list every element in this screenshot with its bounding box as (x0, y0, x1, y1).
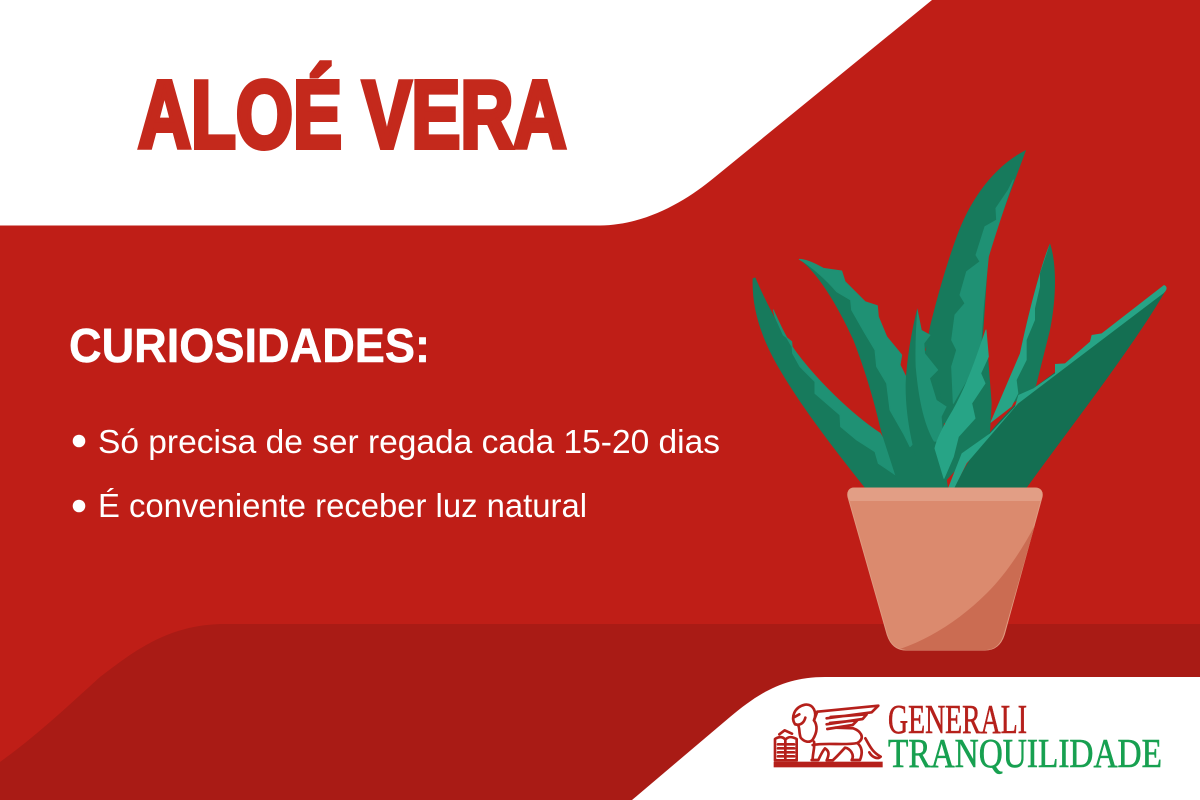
logo base bar (774, 762, 883, 767)
pot rim (848, 488, 1042, 501)
leaf: right narrow (990, 243, 1055, 423)
title: ALOÉ VERA (138, 62, 566, 169)
bullet list (73, 423, 720, 524)
pot body (848, 488, 1042, 650)
panel: bottom white logo shape (632, 677, 1200, 800)
bullet dot 1 (73, 435, 85, 447)
open book (775, 730, 797, 760)
lion wing (814, 706, 878, 729)
panel: dark red floor (0, 624, 1200, 800)
pot shadow (900, 525, 1035, 650)
leaf: big right front (947, 285, 1167, 490)
bullet text 2: É conveniente receber luz natural (98, 487, 587, 524)
lion body (812, 728, 862, 760)
lion head and mane (793, 705, 817, 742)
leaf: far left (753, 277, 907, 490)
leaf: second left (799, 259, 930, 490)
lion face (793, 714, 805, 725)
leaf: small centre left (906, 308, 948, 490)
leaf: tall centre (925, 150, 1026, 423)
bullet dot 2 (73, 500, 85, 512)
leaf: front centre (935, 330, 992, 480)
heading: curiosidades: CURIOSIDADES: (69, 320, 430, 373)
logo: Generali Tranquilidade (774, 696, 1162, 776)
logo text: GENERALI: GENERALI (888, 696, 1027, 742)
illustration: aloe plant leaves (753, 150, 1167, 490)
illustration: flower pot (848, 488, 1042, 650)
bullet text 1: Só precisa de ser regada cada 15-20 dias (98, 423, 720, 460)
lion tail (865, 738, 881, 758)
logo: lion emblem (774, 705, 883, 767)
panel: top white header shape (0, 0, 932, 226)
